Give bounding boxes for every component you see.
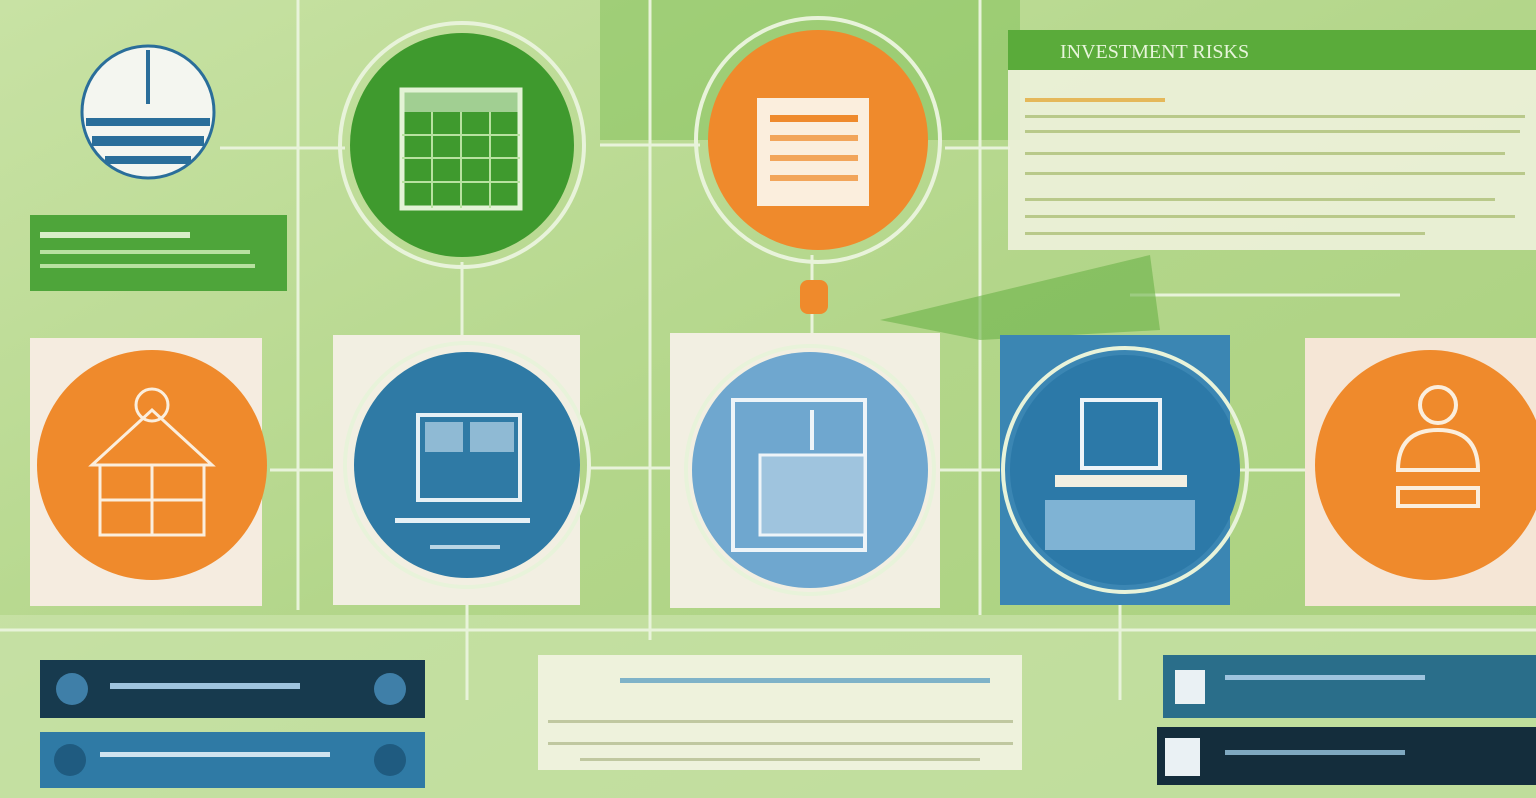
text block: bottom-right bars bbox=[1157, 655, 1536, 785]
icon: window circle bbox=[333, 335, 589, 605]
icon: document circle bbox=[696, 18, 940, 262]
icon: house circle bbox=[30, 338, 267, 606]
icon: podium circle bbox=[1000, 335, 1247, 605]
icon: clock bbox=[82, 46, 214, 178]
icon: person circle bbox=[1305, 338, 1536, 606]
text block: bottom-left dark bar bbox=[40, 660, 425, 718]
text block: bottom-left blue bar bbox=[40, 732, 425, 788]
panel: top-right: INVESTMENT RISKS bbox=[1060, 41, 1249, 63]
icon: blueprint circle bbox=[670, 333, 940, 608]
text block: bottom center bbox=[538, 655, 1022, 770]
panel: top-right bbox=[1008, 30, 1536, 250]
icon: calendar circle bbox=[340, 23, 584, 267]
text block: left green label bbox=[30, 215, 287, 291]
